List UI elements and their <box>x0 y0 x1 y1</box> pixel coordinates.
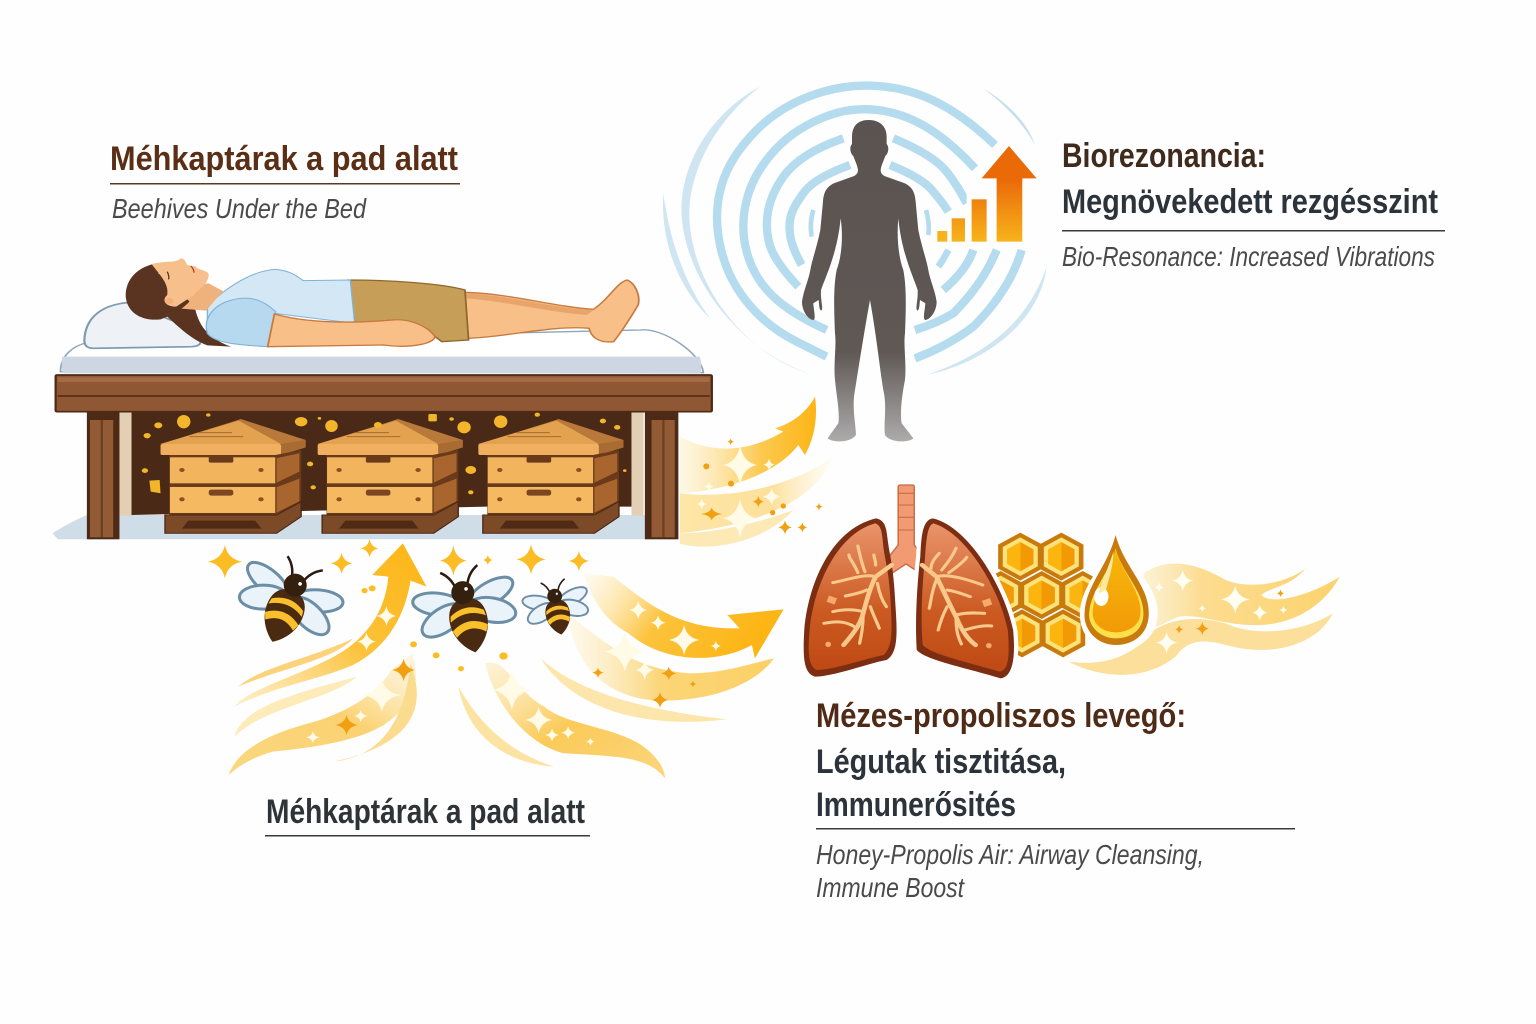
hive 2 <box>318 419 463 533</box>
bee right <box>518 575 596 641</box>
heading: beehives under the bed: Méhkaptárak a pad alatt <box>110 140 458 178</box>
icon: honeycomb <box>978 533 1105 657</box>
heading: bio-resonance: Biorezonancia: <box>1062 137 1266 175</box>
bronchial branches <box>824 546 992 645</box>
golden flow arrow up <box>229 543 427 775</box>
pillow <box>84 303 201 348</box>
bee middle <box>405 558 528 664</box>
heading: honey propolis air: Honey-Propolis Air: Airway Cleansing, <box>816 839 1204 870</box>
heading: honey propolis air: Immunerősités <box>816 786 1016 824</box>
sparkles <box>1154 570 1287 653</box>
golden flow behind honey drop <box>1068 564 1340 675</box>
right lung <box>916 518 1014 678</box>
heading: beehives under the bed, bottom: Méhkaptárak a pad alatt <box>266 793 585 831</box>
heading: honey propolis air: Légutak tisztitása, <box>816 743 1066 781</box>
bee left <box>222 543 354 662</box>
hive 1 <box>161 419 306 533</box>
heading: beehives under the bed <box>110 140 460 224</box>
under-bed dark space <box>132 412 631 515</box>
icon: honey drop <box>1080 528 1158 652</box>
human body silhouette <box>802 120 937 441</box>
trachea <box>881 485 933 573</box>
reclining person <box>126 258 639 347</box>
heading: bio-resonance: Bio-Resonance: Increased Vibrations <box>1062 241 1435 272</box>
golden particles <box>142 413 627 494</box>
heading: bio-resonance: Megnövekedett rezgésszint <box>1062 183 1438 221</box>
golden flow toward the body <box>680 397 833 547</box>
sparkles <box>697 445 781 538</box>
heading: bio-resonance <box>1062 137 1445 272</box>
hive 3 <box>478 419 623 533</box>
icon: lungs <box>804 485 1014 678</box>
bed leg left <box>87 410 119 539</box>
gold sparkles under the bed <box>208 539 589 671</box>
golden flow arrow right <box>458 573 784 778</box>
bed frame <box>56 375 712 412</box>
floor shadow <box>52 515 678 539</box>
massage bed with beehives <box>52 258 712 539</box>
sparkles <box>493 601 721 746</box>
mattress <box>61 330 703 373</box>
sparkles <box>306 606 401 743</box>
heading: honey propolis air: Immune Boost <box>816 872 965 903</box>
heading: honey propolis air: Mézes-propoliszos levegő: <box>816 697 1186 735</box>
wave rings around the body <box>663 86 1047 375</box>
heading: beehives under the bed: Beehives Under the Bed <box>112 193 367 224</box>
heading: honey propolis air <box>816 697 1295 903</box>
bed leg right <box>645 410 678 539</box>
left lung <box>804 518 897 677</box>
icon: rising bars and orange arrow <box>933 138 1041 247</box>
